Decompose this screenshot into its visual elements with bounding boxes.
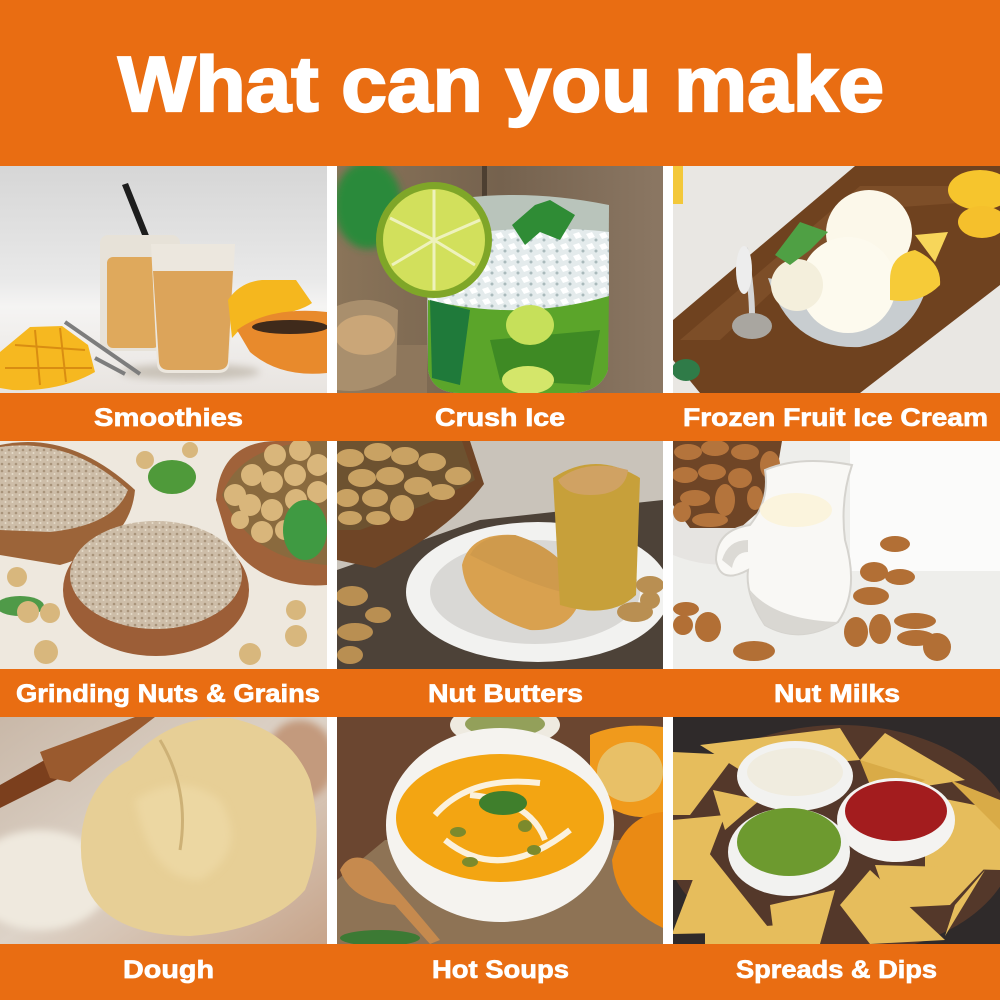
- photo: crushed ice: [334, 161, 663, 394]
- photo: smoothies: [0, 166, 328, 393]
- photo: nut milks: [672, 440, 1000, 669]
- label: Nut Milks: Nut Milks: [774, 680, 900, 708]
- photo: grinding nuts and grains: [0, 439, 329, 669]
- label: Hot Soups: Hot Soups: [432, 956, 569, 984]
- label: Grinding Nuts & Grains: Grinding Nuts & Grains: [16, 680, 320, 708]
- photo: frozen fruit ice cream: [672, 166, 1000, 393]
- photo: dough: [0, 717, 335, 944]
- photo: nut butters: [335, 441, 670, 669]
- label: Dough: Dough: [123, 956, 214, 984]
- label: Smoothies: Smoothies: [94, 404, 243, 432]
- title: What can you make: [118, 40, 884, 128]
- label: Nut Butters: Nut Butters: [428, 680, 583, 708]
- photo: hot soups: [337, 703, 663, 946]
- label: Spreads & Dips: Spreads & Dips: [736, 956, 937, 984]
- column gap: left: [327, 166, 337, 944]
- column gap: right: [663, 166, 673, 944]
- label: Frozen Fruit Ice Cream: Frozen Fruit Ice Cream: [683, 404, 988, 432]
- photo: spreads and dips: [665, 717, 1000, 955]
- label: Crush Ice: Crush Ice: [435, 404, 565, 432]
